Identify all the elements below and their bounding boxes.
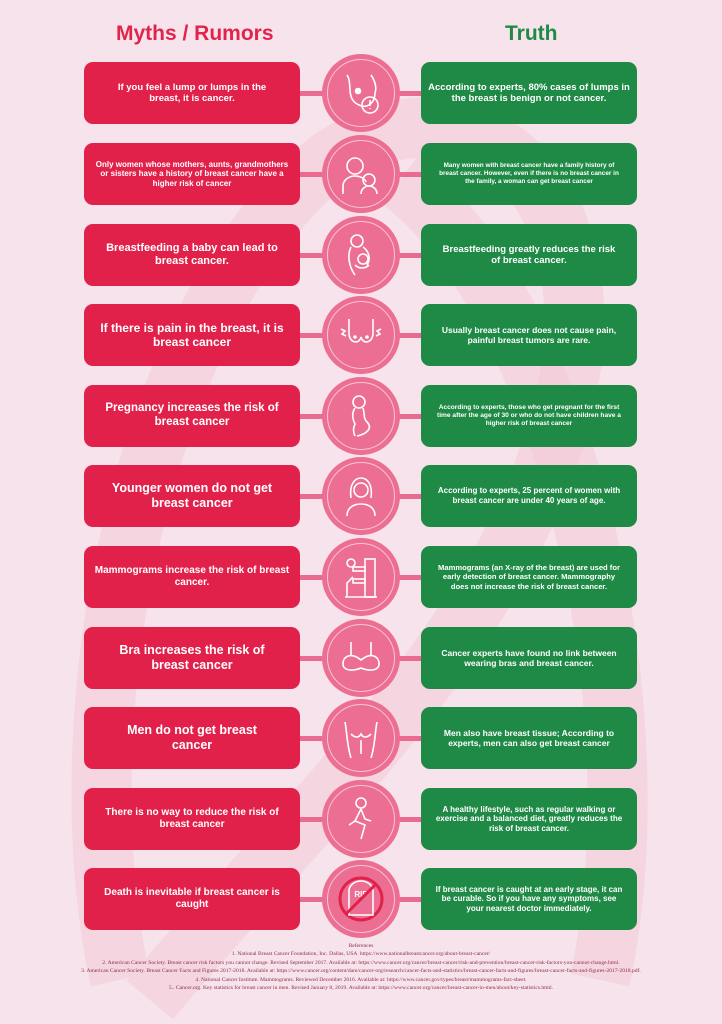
icon: bra bbox=[322, 619, 400, 697]
icon: RIP crossed bbox=[322, 860, 400, 938]
row 8 bbox=[84, 619, 637, 697]
references: 1. National Breast Cancer Foundation, Inc. Dallas, USA https://www.nationalbreastcancer.org/about-breast-cancer/ bbox=[232, 951, 490, 957]
truth 6: According to experts, 25 percent of women with breast cancer are under 40 years of age. bbox=[438, 486, 620, 505]
row 5 bbox=[84, 377, 637, 455]
myth 11: Death is inevitable if breast cancer is caught bbox=[104, 887, 280, 910]
icon: RIP crossed: RIP bbox=[354, 890, 368, 899]
truth 10 bbox=[421, 788, 637, 850]
icon: breastfeeding bbox=[322, 216, 400, 294]
truth 3 bbox=[421, 224, 637, 286]
myth 1 bbox=[84, 62, 300, 124]
truth 11 bbox=[421, 868, 637, 930]
truth 1 bbox=[421, 62, 637, 124]
references: 4. National Cancer Institute. Mammograms. Reviewed December 2016. Available at: https://www.cancer.gov/types/breast/mammograms-fact-sheet. bbox=[195, 977, 527, 983]
myth 9 bbox=[84, 707, 300, 769]
truth 9 bbox=[421, 707, 637, 769]
icon: mammogram machine bbox=[322, 538, 400, 616]
truth 5: According to experts, those who get pregnant for the first time after the age of 30 or who do not have children have a higher risk of breast cancer bbox=[437, 404, 621, 427]
truth 6 bbox=[421, 465, 637, 527]
myth 10: There is no way to reduce the risk of breast cancer bbox=[105, 807, 279, 830]
myth 10 bbox=[84, 788, 300, 850]
myth 8 bbox=[84, 627, 300, 689]
row 1 bbox=[84, 54, 637, 132]
truth 4: Usually breast cancer does not cause pain, painful breast tumors are rare. bbox=[442, 325, 616, 345]
myth 1: If you feel a lump or lumps in the breast, it is cancer. bbox=[118, 82, 266, 104]
truth 4 bbox=[421, 304, 637, 366]
truth 9: Men also have breast tissue; According to experts, men can also get breast cancer bbox=[444, 728, 614, 748]
myth 7: Mammograms increase the risk of breast cancer. bbox=[95, 565, 289, 588]
row 11 bbox=[84, 860, 637, 938]
myth 3 bbox=[84, 224, 300, 286]
myth 2: Only women whose mothers, aunts, grandmothers or sisters have a history of breast cancer have a higher risk of cancer bbox=[96, 160, 288, 188]
references: 3. American Cancer Society. Breast Cancer Facts and Figures 2017-2018. Available at: https://www.cancer.org/content/dam/cancer-org/research/cancer-facts-and-statistics/breast-cancer-facts-and-figures/breast-cancer-facts-and-figures-2017-2018.pdf. bbox=[81, 968, 641, 974]
references: References bbox=[349, 943, 373, 949]
icon: walking woman bbox=[322, 780, 400, 858]
myth 2 bbox=[84, 143, 300, 205]
icon: young woman bbox=[322, 457, 400, 535]
truth 7 bbox=[421, 546, 637, 608]
row 3 bbox=[84, 216, 637, 294]
truth 2: Many women with breast cancer have a family history of breast cancer. However, even if there is no breast cancer in the family, a woman can get breast cancer bbox=[439, 162, 619, 185]
references: 2. American Cancer Society. Breast cancer risk factors you cannot change. Revised September 2017. Available at: https://www.cancer.org/cancer/breast-cancer/risk-and-prevention/breast-cancer-risk-factors-you-cannot-change.html. bbox=[102, 960, 620, 966]
references bbox=[81, 943, 641, 991]
myth 5: Pregnancy increases the risk of breast cancer bbox=[105, 402, 279, 428]
truth 5 bbox=[421, 385, 637, 447]
myth 8: Bra increases the risk of breast cancer bbox=[119, 643, 265, 672]
icon: pregnant woman bbox=[322, 377, 400, 455]
truth 8 bbox=[421, 627, 637, 689]
row 10 bbox=[84, 780, 637, 858]
myth 11 bbox=[84, 868, 300, 930]
myth 7 bbox=[84, 546, 300, 608]
myth 6: Younger women do not get breast cancer bbox=[112, 481, 272, 510]
myth 4: If there is pain in the breast, it is breast cancer bbox=[100, 321, 284, 349]
icon: male chest bbox=[322, 699, 400, 777]
truth 11: If breast cancer is caught at an early stage, it can be curable. So if you have any symptoms, see your nearest doctor immediately. bbox=[436, 885, 622, 913]
myth 3: Breastfeeding a baby can lead to breast cancer. bbox=[106, 242, 278, 267]
icon: mother and daughter bbox=[322, 135, 400, 213]
truth 1: According to experts, 80% cases of lumps in the breast is benign or not cancer. bbox=[428, 82, 630, 104]
truth 7: Mammograms (an X-ray of the breast) are used for early detection of breast cancer. Mammography does not increase the risk of breast cancer. bbox=[438, 563, 620, 591]
row 7 bbox=[84, 538, 637, 616]
myth 9: Men do not get breast cancer bbox=[127, 723, 257, 752]
myth 5 bbox=[84, 385, 300, 447]
truth 2 bbox=[421, 143, 637, 205]
title: truth: Truth bbox=[505, 22, 558, 45]
icon: lump bbox=[322, 54, 400, 132]
row 4 bbox=[84, 296, 637, 374]
row 2 bbox=[84, 135, 637, 213]
myth 4 bbox=[84, 304, 300, 366]
row 6 bbox=[84, 457, 637, 535]
truth 10: A healthy lifestyle, such as regular walking or exercise and a balanced diet, greatly reduces the risk of breast cancer. bbox=[436, 805, 622, 833]
icon: chest pain bbox=[322, 296, 400, 374]
truth 3: Breastfeeding greatly reduces the risk of breast cancer. bbox=[443, 244, 615, 266]
myth 6 bbox=[84, 465, 300, 527]
row 9 bbox=[84, 699, 637, 777]
references: 5.. Cancer.org. Key statistics for breast cancer in men. Revised January 8, 2019. Available at: https://www.cancer.org/cancer/breast-cancer-in-men/about/key-statistics.html. bbox=[169, 985, 553, 991]
title: myths: Myths / Rumors bbox=[116, 22, 274, 45]
truth 8: Cancer experts have found no link between wearing bras and breast cancer. bbox=[441, 648, 617, 668]
